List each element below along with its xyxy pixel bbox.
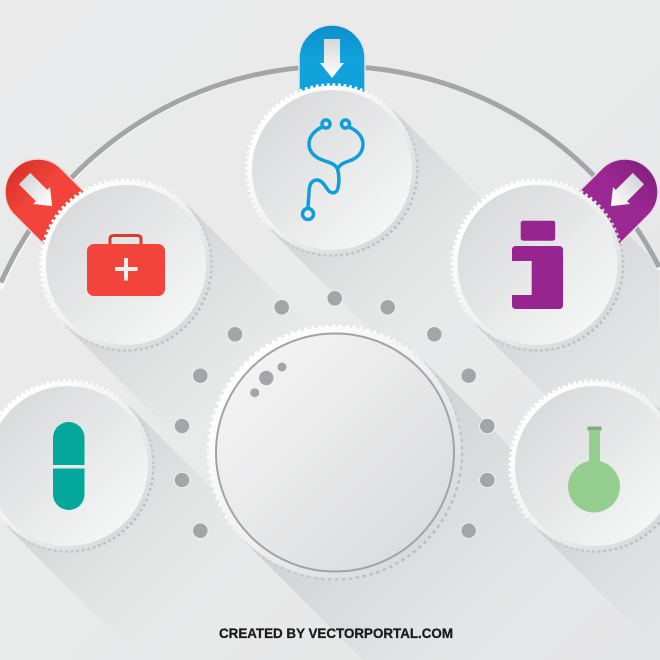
dial highlight dots — [250, 362, 287, 398]
panel: capsule disc — [0, 380, 154, 552]
tab: purple arrow — [565, 145, 660, 252]
dial dots — [174, 291, 495, 538]
icon: purple tab arrow — [602, 170, 647, 215]
icon: capsule — [49, 422, 86, 510]
icon: red tab arrow — [16, 170, 61, 215]
tab: red arrow — [0, 145, 98, 252]
credit text: CREATED BY VECTORPORTAL.COM — [219, 626, 453, 641]
panel: central dial — [208, 326, 462, 580]
icon: stethoscope — [302, 120, 363, 220]
panel: medicine bottle disc — [452, 180, 623, 350]
panel: stethoscope disc — [246, 84, 418, 256]
large arc — [1, 66, 659, 289]
icon: flask — [568, 426, 620, 512]
panel: flask disc — [510, 380, 660, 552]
icon: medicine bottle — [512, 221, 563, 309]
panel: first aid kit disc — [40, 180, 212, 350]
icon: first aid kit — [87, 236, 165, 296]
tab: blue arrow — [299, 25, 365, 110]
icon: down arrow — [320, 39, 344, 78]
